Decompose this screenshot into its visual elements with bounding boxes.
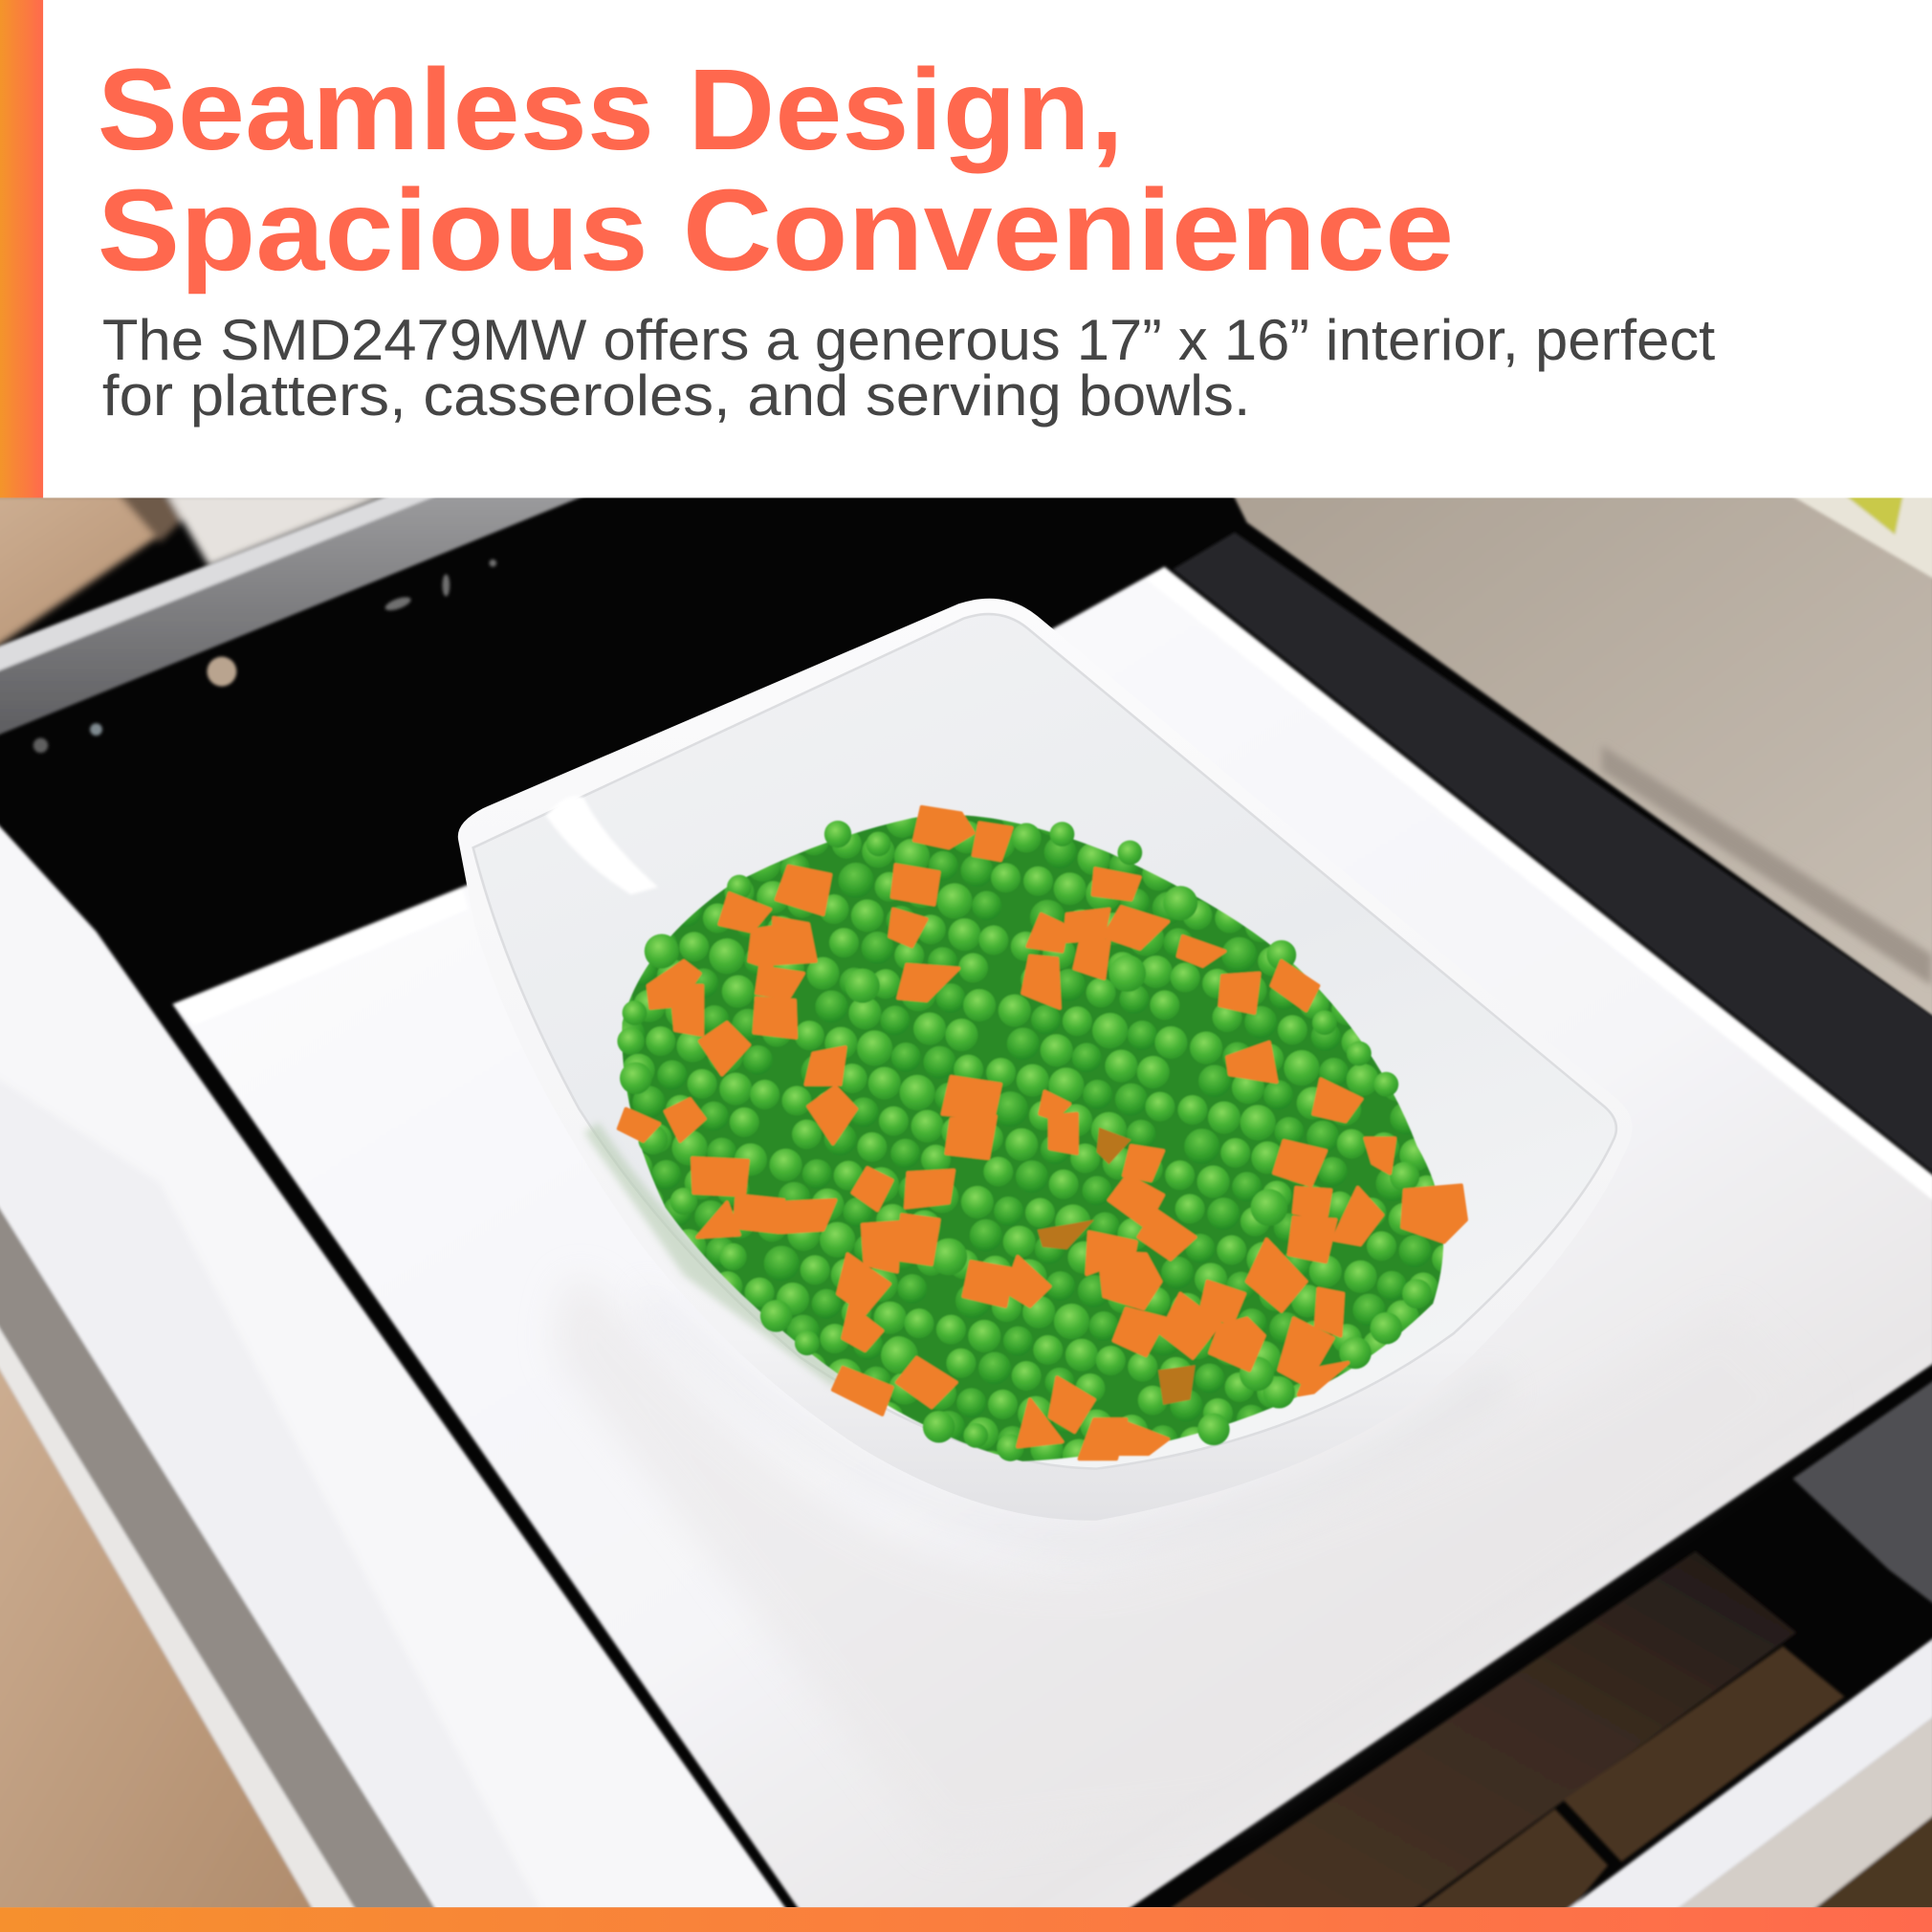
left front wall of drawer bbox=[0, 813, 788, 1912]
countertop wood, top left bbox=[0, 493, 394, 653]
yellow label, top right bbox=[1787, 493, 1932, 579]
peas pile bbox=[621, 815, 1444, 1462]
soft tray shading bbox=[568, 1301, 905, 1636]
accent bar: left gradient bbox=[0, 0, 43, 497]
header panel bbox=[0, 0, 1932, 497]
bowl bbox=[458, 599, 1633, 1555]
darker carrots under peas bbox=[1038, 1128, 1196, 1405]
peas and carrots bbox=[591, 788, 1491, 1479]
subtitle text bbox=[102, 307, 1715, 428]
photo: microwave drawer with bowl of peas and carrots bbox=[0, 493, 1932, 1912]
cavity marks and screws bbox=[33, 560, 496, 753]
dark side rail, right bbox=[1173, 533, 1932, 1173]
title: Spacious Convenience bbox=[98, 165, 1454, 295]
bottom gradient bar bbox=[0, 1907, 1932, 1932]
lower right drawer hardware bbox=[1164, 1380, 1932, 1912]
subtitle text: for platters, casseroles, and serving bowls. bbox=[102, 362, 1251, 428]
green reflection in bowl bbox=[591, 1128, 838, 1380]
printed text blur on cavity wall bbox=[1602, 745, 1932, 986]
subtitle text: The SMD2479MW offers a generous 17” x 16” interior, perfect bbox=[102, 307, 1715, 372]
title bbox=[98, 44, 1454, 295]
bowl contact shadow bbox=[641, 1282, 1516, 1555]
perimeter peas bbox=[617, 821, 1432, 1461]
bowl highlight bbox=[546, 796, 658, 894]
bowl outer body bbox=[457, 599, 1284, 1521]
white tray bbox=[172, 567, 1932, 1912]
title: Seamless Design, bbox=[98, 44, 1124, 174]
drawer top rim bbox=[0, 493, 591, 739]
cavity interior, top right bbox=[1232, 493, 1932, 1018]
bowl inner well bbox=[473, 614, 1616, 1469]
carrot cubes bbox=[619, 807, 1466, 1459]
